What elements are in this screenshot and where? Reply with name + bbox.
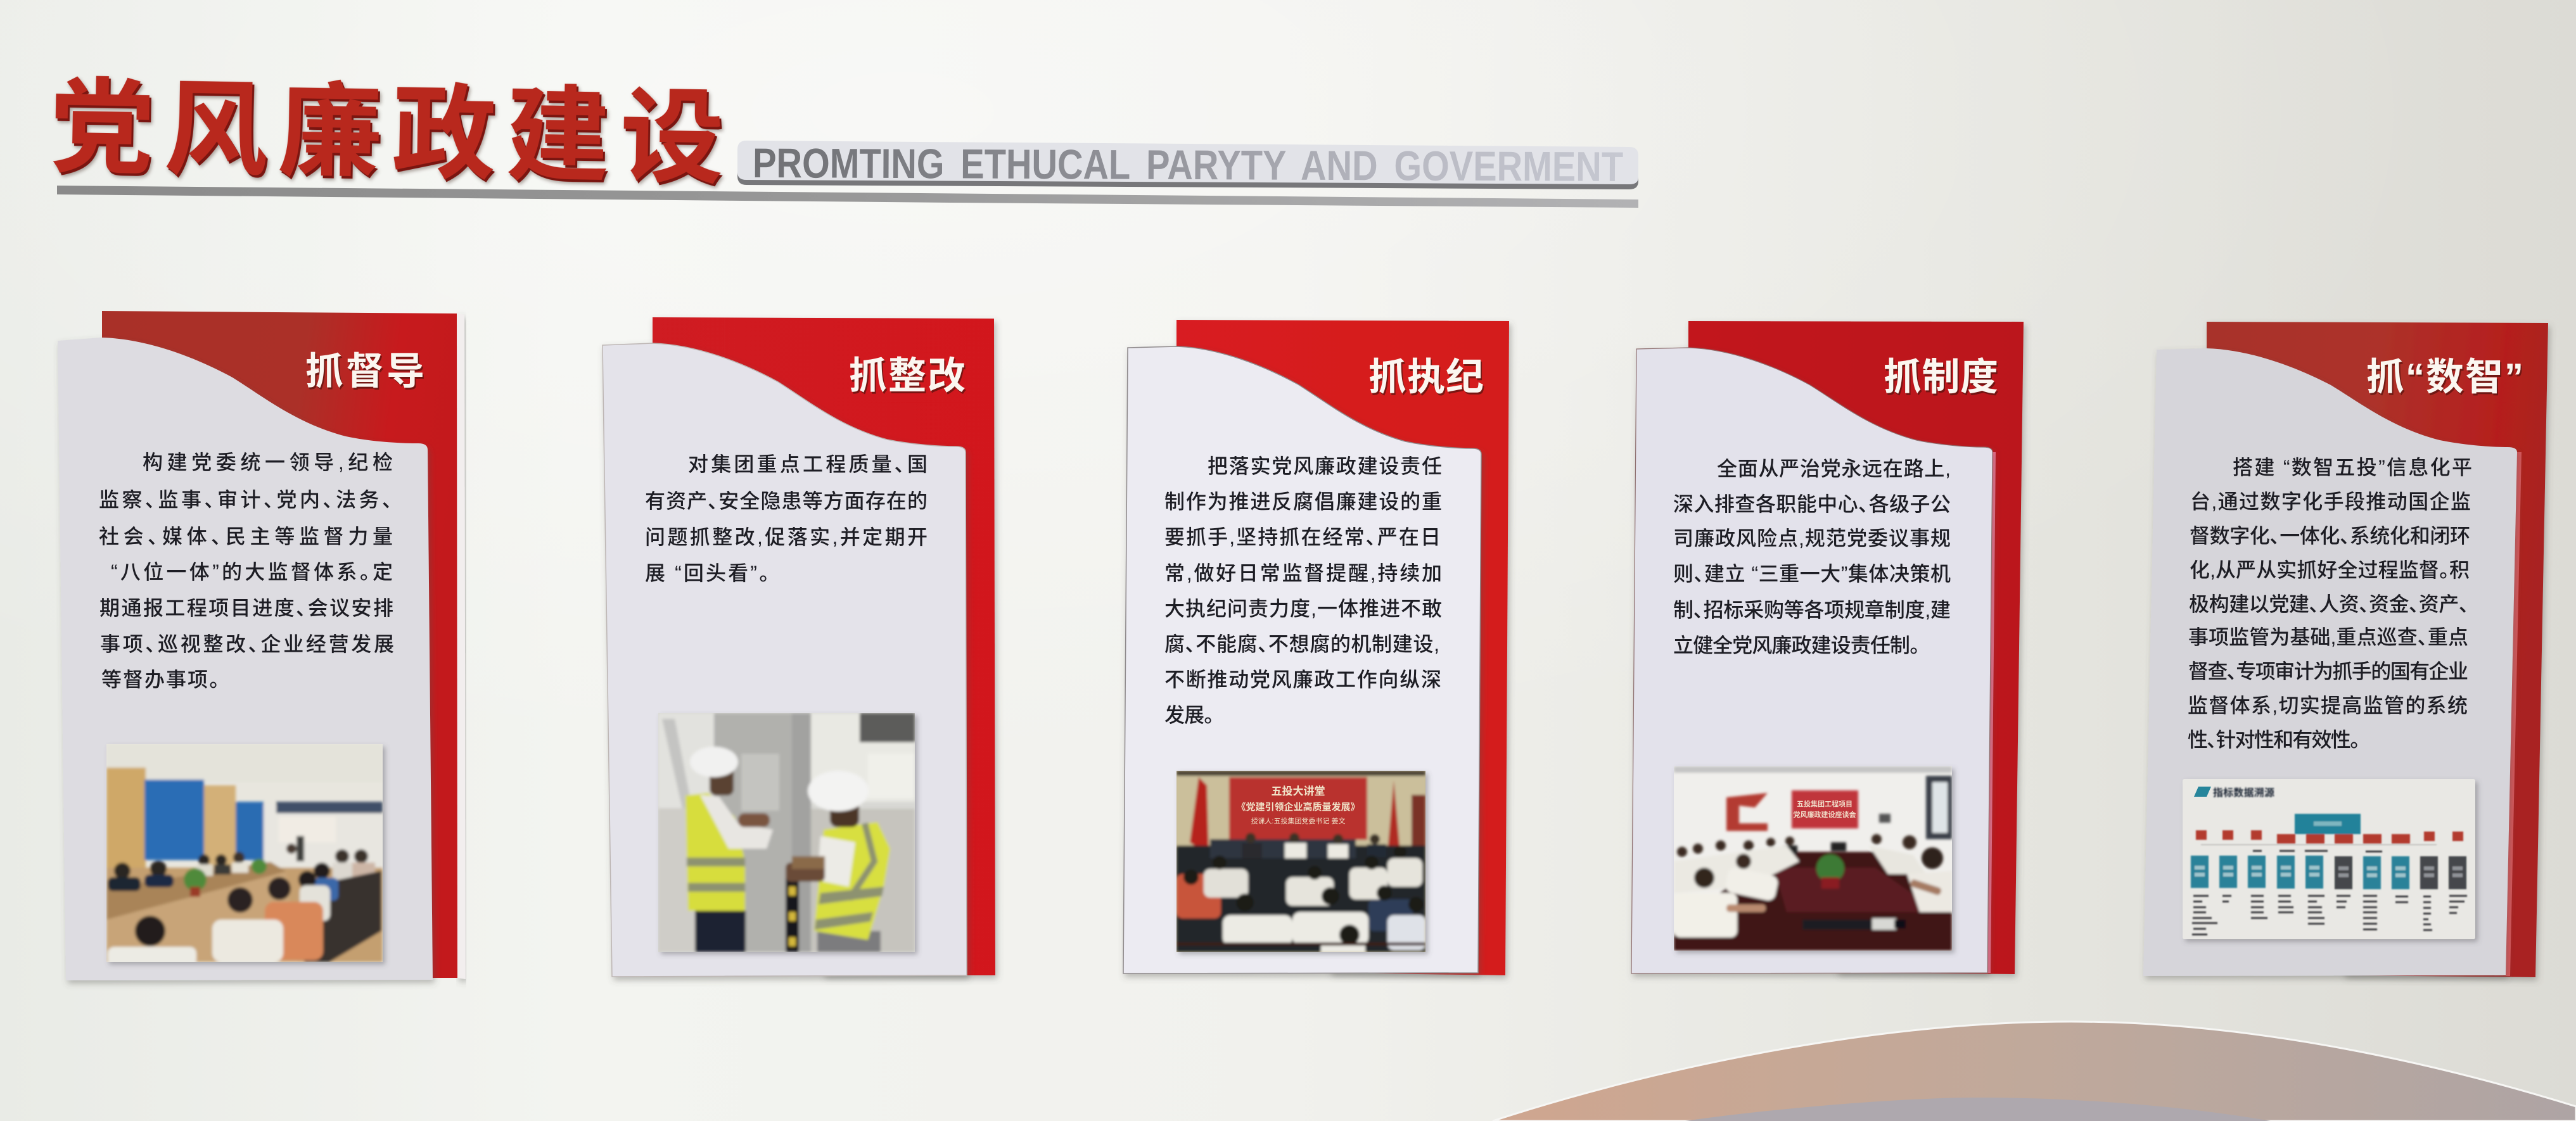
diagram header: [2194, 787, 2274, 799]
body text: “八位一体”的大监督体系。定: [111, 560, 393, 583]
body text: [99, 451, 394, 691]
pink edge on strip: [1987, 452, 1996, 973]
body text: 展 “回头看”。: [645, 562, 769, 585]
body text: [2188, 456, 2472, 751]
diagram chart: [2191, 814, 2467, 935]
wall slogan: 五投集团工程项目: [1797, 799, 1852, 808]
body text: 制作为推进反腐倡廉建设的重: [1164, 490, 1442, 513]
body text: 构建党委统一领导,纪检: [143, 451, 393, 474]
banner text: 五投大讲堂: [1271, 785, 1325, 797]
white panel: [1123, 346, 1481, 973]
body text: 期通报工程项目进度、会议安排: [99, 597, 393, 619]
body text: 等督办事项。: [101, 668, 219, 691]
diagram header: 指标数据溯源: [2213, 787, 2274, 799]
white panel: [58, 338, 433, 980]
red header and strip: [1176, 320, 1509, 975]
body text: 全面从严治党永远在路上,: [1717, 457, 1951, 480]
pink edge on strip: [2506, 452, 2522, 976]
body text: 事项、巡视整改、企业经营发展: [100, 633, 394, 656]
photo: conference table: 党风廉政建设座谈会: [1793, 810, 1856, 819]
body text: [1164, 455, 1442, 726]
body text: 事项监管为基础,重点巡查、重点: [2188, 626, 2468, 649]
photo: meeting room: [106, 744, 383, 966]
banner text: 授课人:五投集团党委书记 姜文: [1251, 816, 1346, 825]
body text: 则、建立 “三重一大”集体决策机: [1673, 562, 1951, 585]
panel: 抓制度: [1631, 321, 2024, 974]
body text: 台,通过数字化手段推动国企监: [2190, 490, 2471, 513]
body text: 监察、监事、审计、党内、法务、: [99, 488, 392, 511]
red header and strip: [1688, 321, 2024, 974]
body text: 对集团重点工程质量、国: [688, 453, 928, 476]
heading: 抓督导: [305, 350, 424, 393]
body text: [645, 453, 928, 585]
underline bar beneath title: [57, 186, 1638, 208]
body text: 问题抓整改,促落实,并定期开: [645, 526, 928, 548]
photo: conference table: [1674, 766, 1952, 951]
body text: 制、招标采购等各项规章制度,建: [1673, 598, 1951, 621]
body text: 发展。: [1164, 704, 1214, 726]
body text: 深入排查各职能中心、各级子公: [1673, 493, 1951, 516]
body text: 常,做好日常监督提醒,持续加: [1164, 562, 1442, 585]
body text: 化,从严从实抓好全过程监督。积: [2190, 559, 2470, 581]
body text: [1673, 457, 1951, 657]
subtitle text: PROMTING ETHUCAL PARYTY AND GOVERMENT: [753, 139, 1623, 190]
body text: 立健全党风廉政建设责任制。: [1673, 634, 1920, 657]
body text: 把落实党风廉政建设责任: [1208, 455, 1442, 478]
body text: 有资产、安全隐患等方面存在的: [645, 490, 928, 512]
heading: 抓“数智”: [2366, 356, 2523, 398]
white panel: [1631, 348, 1993, 973]
red header and strip: [653, 317, 995, 975]
red header and strip: [2207, 322, 2548, 977]
body text: 要抓手,坚持抓在经常、严在日: [1164, 526, 1441, 548]
body text: 性、针对性和有效性。: [2188, 728, 2360, 751]
white panel: [2143, 348, 2517, 976]
bottom decorative arc: [1493, 1022, 2576, 1121]
panel: 抓执纪: [1123, 320, 1509, 975]
worker two: [817, 931, 881, 952]
body text: 监督体系,切实提高监管的系统: [2188, 694, 2468, 717]
body text: 极构建以党建、人资、资金、资产、: [2189, 593, 2469, 616]
white panel: [603, 343, 967, 977]
heading: 抓制度: [1884, 356, 1998, 398]
body text: 社会、媒体、民主等监督力量: [99, 525, 393, 548]
red header and strip: [102, 311, 457, 978]
subtitle plate: [737, 139, 1638, 190]
heading: 抓执纪: [1368, 356, 1484, 398]
heading: 抓整改: [849, 355, 966, 397]
body text: 督查、专项审计为抓手的国有企业: [2188, 660, 2468, 683]
body text: 大执纪问责力度,一体推进不敢: [1164, 597, 1442, 620]
panel: 抓整改: [603, 317, 995, 977]
photo: site inspection workers: [658, 713, 915, 952]
body text: 不断推动党风廉政工作向纵深: [1164, 668, 1441, 691]
title: 党风廉政建设: 党风廉政建设: [49, 70, 725, 197]
body text: 腐、不能腐、不想腐的机制建设,: [1164, 633, 1439, 656]
body text: 搭建 “数智五投”信息化平: [2233, 456, 2472, 479]
data source diagram card: [2183, 779, 2475, 939]
worker one: [695, 911, 746, 952]
banner text: 《党建引领企业高质量发展》: [1236, 801, 1360, 813]
banner text: [1241, 785, 1355, 825]
body text: 督数字化、一体化、系统化和闭环: [2190, 524, 2470, 547]
panel: 抓“数智”: [2143, 322, 2548, 977]
panel: 抓督导: [58, 311, 466, 980]
body text: 司廉政风险点,规范党委议事规: [1673, 527, 1951, 550]
panel side edge: [457, 314, 466, 979]
photo: lecture hall: [1176, 771, 1425, 953]
